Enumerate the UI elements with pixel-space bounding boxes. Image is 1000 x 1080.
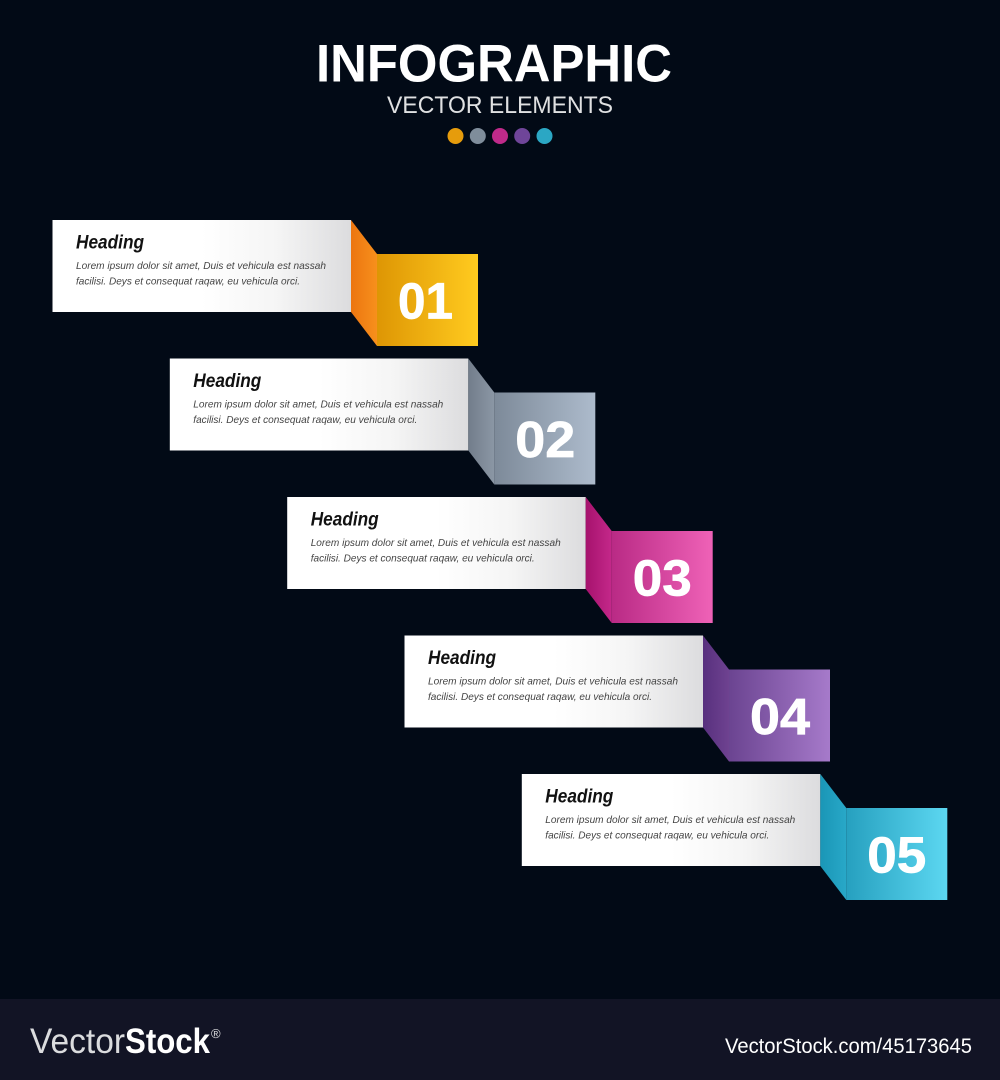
step 04 [404,636,830,762]
step 01 [52,220,478,346]
step 03 number block [612,531,713,623]
footer logo [30,1022,221,1061]
subtitle: VECTOR ELEMENTS [387,92,613,119]
step 02 number block [494,392,595,484]
step 02 text panel [170,358,468,450]
step 04 body: Lorem ipsum dolor sit amet, Duis et vehicula est nassah [428,676,678,688]
step 05 [522,774,947,900]
step 01 number block [377,254,478,346]
step 04 heading: Heading [428,648,496,669]
step 05 body: facilisi. Deys et consequat raqaw, eu vehicula orci. [545,830,769,842]
step 01 body: facilisi. Deys et consequat raqaw, eu vehicula orci. [76,276,300,288]
footer logo: ® [211,1026,221,1041]
step 02 number: 02 [515,411,575,468]
step 02 body: Lorem ipsum dolor sit amet, Duis et vehicula est nassah [193,398,443,410]
step 03 fold [586,497,612,623]
step 02 [170,358,595,484]
colour dots [448,128,552,144]
step 01 number: 01 [398,272,453,330]
footer image id: VectorStock.com/45173645 [725,1035,972,1058]
step 03 heading: Heading [311,510,379,530]
title: INFOGRAPHIC [316,34,672,94]
step 05 text panel [522,774,820,866]
step 01 text panel [52,220,351,312]
footer logo: Stock [125,1022,210,1061]
step 03 number: 03 [633,550,692,606]
step 03 body: facilisi. Deys et consequat raqaw, eu vehicula orci. [311,552,535,564]
footer band [0,999,1000,1080]
step 03 body: Lorem ipsum dolor sit amet, Duis et vehicula est nassah [311,537,561,549]
step 01 body: Lorem ipsum dolor sit amet, Duis et vehicula est nassah [76,260,326,272]
step 04 number block [729,670,830,762]
step 03 [287,497,713,623]
step 03 text panel [287,497,586,589]
step 04 text panel [404,636,703,728]
step 05 heading: Heading [545,786,614,808]
step 05 number block [846,808,947,900]
step 05 number: 05 [867,826,926,884]
step 02 body: facilisi. Deys et consequat raqaw, eu vehicula orci. [193,414,417,426]
footer logo: Vector [30,1022,125,1061]
step 02 heading: Heading [193,371,262,392]
step 04 number: 04 [750,688,811,745]
step 04 fold [703,636,729,762]
step 01 heading: Heading [76,232,144,254]
step 01 fold [351,220,377,346]
step 04 body: facilisi. Deys et consequat raqaw, eu vehicula orci. [428,691,652,703]
step 05 fold [820,774,846,900]
step 02 fold [468,358,494,484]
step 05 body: Lorem ipsum dolor sit amet, Duis et vehicula est nassah [545,814,795,826]
